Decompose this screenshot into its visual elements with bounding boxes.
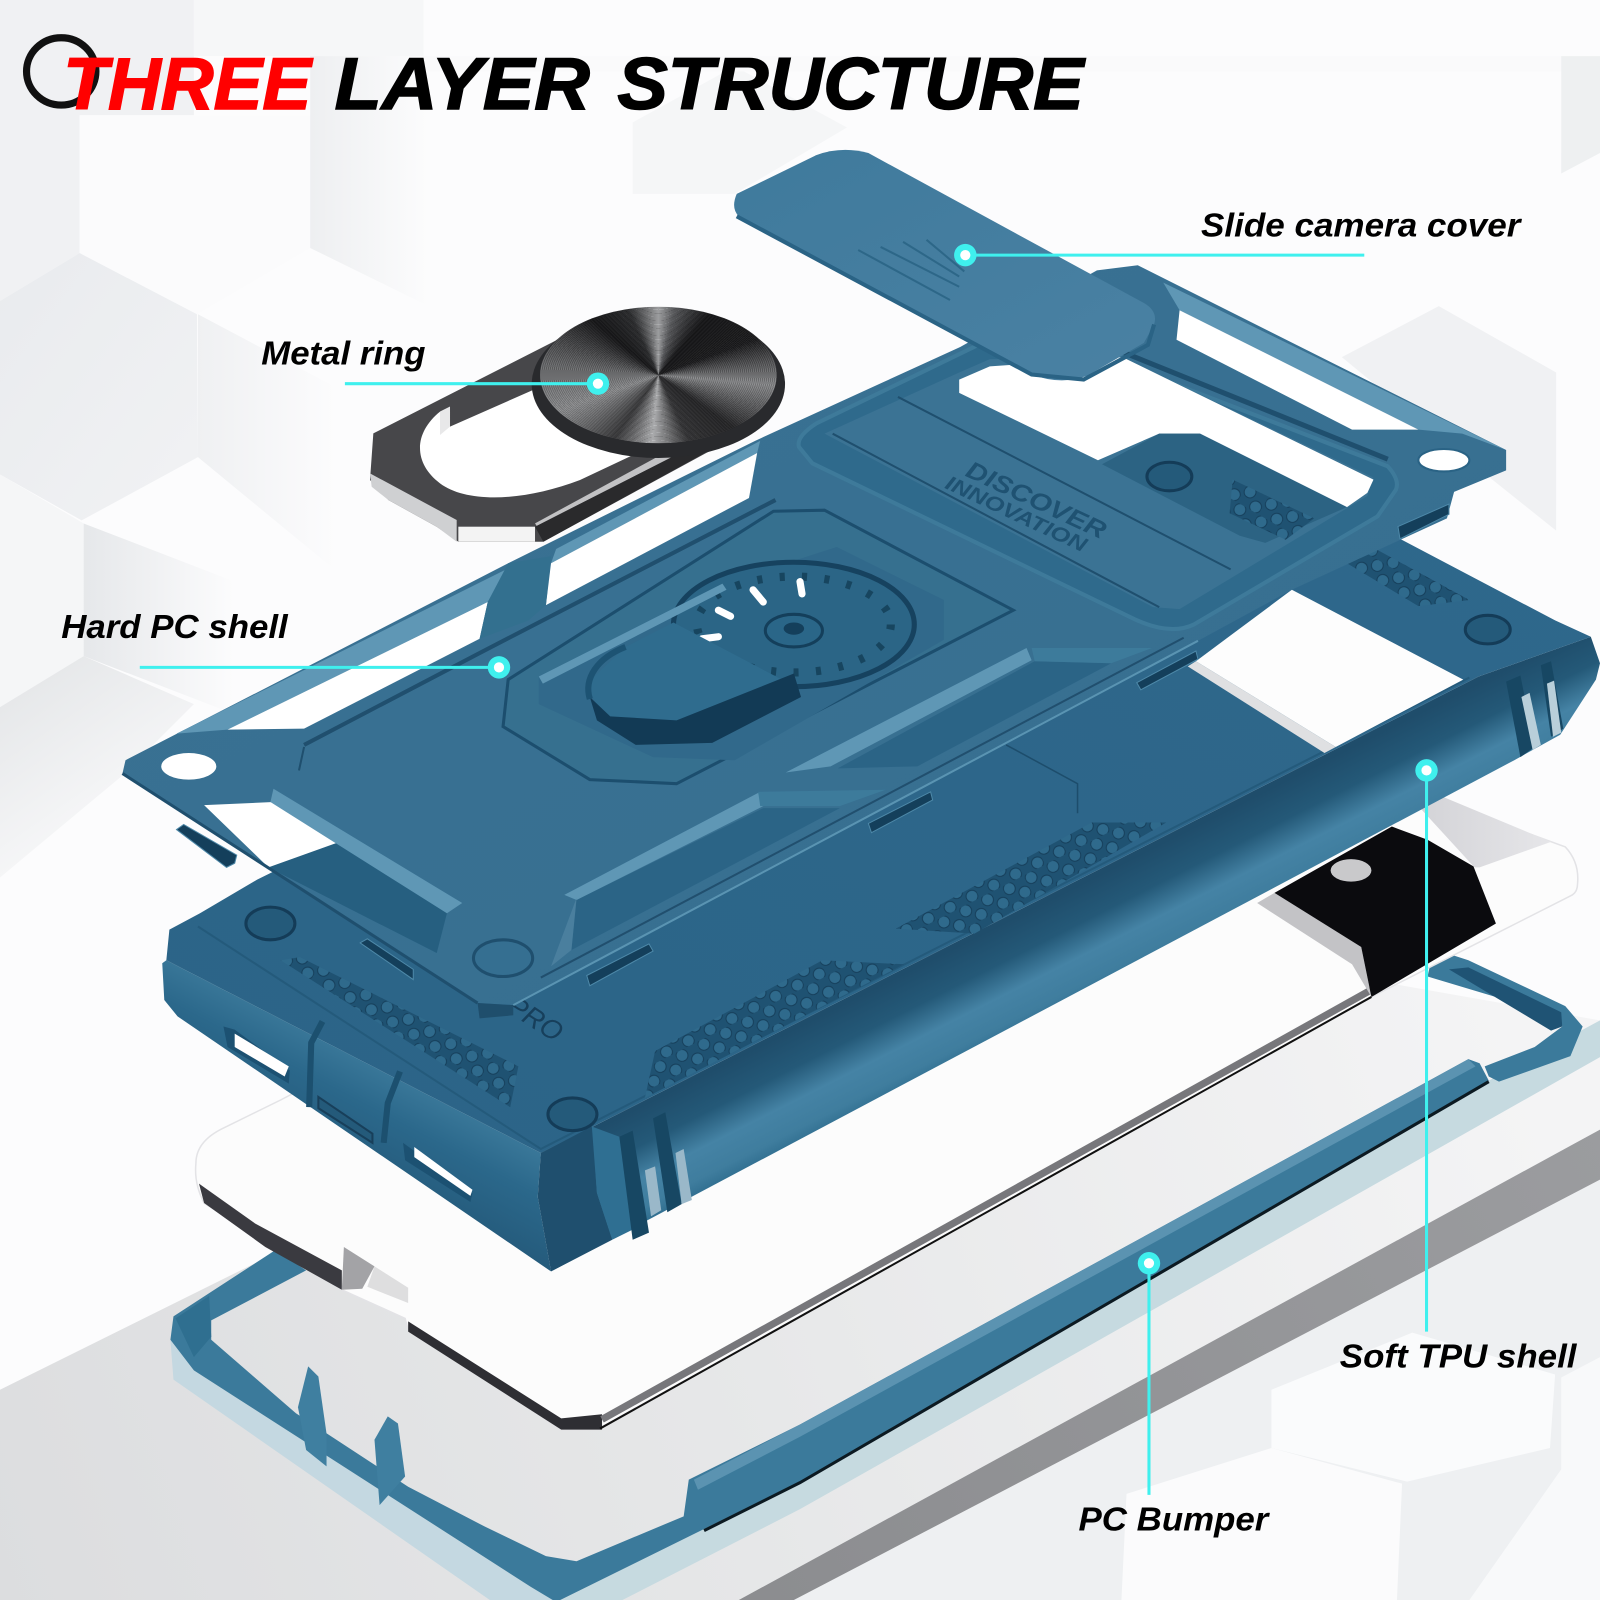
phone lower left edge <box>199 1184 342 1290</box>
shell corner <box>478 1003 513 1018</box>
ring holder octagon <box>503 510 1013 784</box>
dial disc <box>673 562 914 687</box>
disc body <box>532 310 785 458</box>
layer: soft TPU shell <box>162 434 1600 1271</box>
cutout windows <box>161 453 757 867</box>
right frame white strip <box>1177 310 1418 430</box>
marble surface <box>0 918 1600 1600</box>
callout: soft TPU shell: Soft TPU shell <box>1340 1338 1577 1375</box>
TPU ridges <box>619 661 1563 1240</box>
discover innovation text <box>942 456 1110 558</box>
camera frame <box>799 324 1397 629</box>
hex pads <box>281 957 518 1107</box>
light edge bars <box>270 648 1032 913</box>
upper screw <box>1147 462 1192 491</box>
bumper hook left <box>298 1366 327 1466</box>
charge port clip <box>309 1021 400 1143</box>
bumper main loop <box>170 1059 1489 1600</box>
shell silhouette <box>122 265 1506 1005</box>
TPU top face <box>166 434 1591 1153</box>
title word: STRUCTURE: STRUCTURE <box>617 42 1086 125</box>
callout: metal ring <box>261 335 609 395</box>
callout: soft TPU shell <box>1340 759 1577 1375</box>
discover innovation text: INNOVATION <box>942 472 1091 558</box>
upper bands <box>177 283 1506 734</box>
metal ring <box>370 307 785 542</box>
camera bar shading <box>1418 791 1551 867</box>
upper pad through window <box>1230 480 1314 540</box>
grip slots <box>177 504 1449 986</box>
layer: hard PC shell <box>122 265 1506 1018</box>
right frame hole <box>1418 449 1469 471</box>
title word: THREE: THREE <box>63 42 313 125</box>
screws <box>246 615 1510 1131</box>
camera inner plate <box>824 357 1373 609</box>
lower right hex wall <box>794 1180 1600 1600</box>
TPU panel lines <box>948 711 1078 813</box>
strut <box>480 556 551 639</box>
screw hole <box>473 940 533 977</box>
camera window white <box>959 357 1373 507</box>
title word: LAYER: LAYER <box>335 42 590 125</box>
disc top <box>540 307 777 443</box>
callout: metal ring: Metal ring <box>261 335 426 372</box>
TPU visible through camera window <box>1102 434 1347 543</box>
port right <box>403 1143 472 1202</box>
callout: PC bumper: PC Bumper <box>1079 1502 1270 1539</box>
callout: hard PC shell <box>61 609 510 679</box>
windows showing TPU <box>571 808 840 950</box>
port left <box>223 1027 290 1084</box>
slide camera cover part <box>734 150 1155 380</box>
bumper frame <box>170 949 1583 1600</box>
callout: PC bumper <box>1079 1252 1270 1539</box>
title ring mark <box>27 38 96 105</box>
title <box>27 38 1086 125</box>
bumper right corner <box>1428 949 1583 1082</box>
ring plate <box>370 335 730 542</box>
TPU short side <box>162 960 551 1271</box>
bumper hook right <box>374 1416 405 1505</box>
camera lens <box>1331 859 1371 882</box>
ring opening <box>420 388 637 497</box>
phone side button <box>342 1247 374 1290</box>
discover innovation text: DISCOVER <box>962 456 1110 545</box>
camera bar <box>1274 827 1496 997</box>
dark slab edge <box>739 1130 1600 1600</box>
ring silver edges <box>370 473 457 542</box>
callout: hard PC shell: Hard PC shell <box>61 609 288 646</box>
slide track lines <box>833 397 1231 607</box>
phone <box>196 714 1578 1430</box>
TPU corner chamfer <box>538 1127 612 1271</box>
bumper shadows <box>556 1020 1600 1600</box>
callout: slide camera cover: Slide camera cover <box>1201 208 1522 245</box>
TPU window <box>1196 590 1463 747</box>
PRO mark: PRO <box>502 989 569 1048</box>
ring holder loop <box>539 584 801 745</box>
plate outline <box>299 747 304 770</box>
callout: slide camera cover <box>954 208 1522 266</box>
TPU long side <box>541 637 1600 1271</box>
